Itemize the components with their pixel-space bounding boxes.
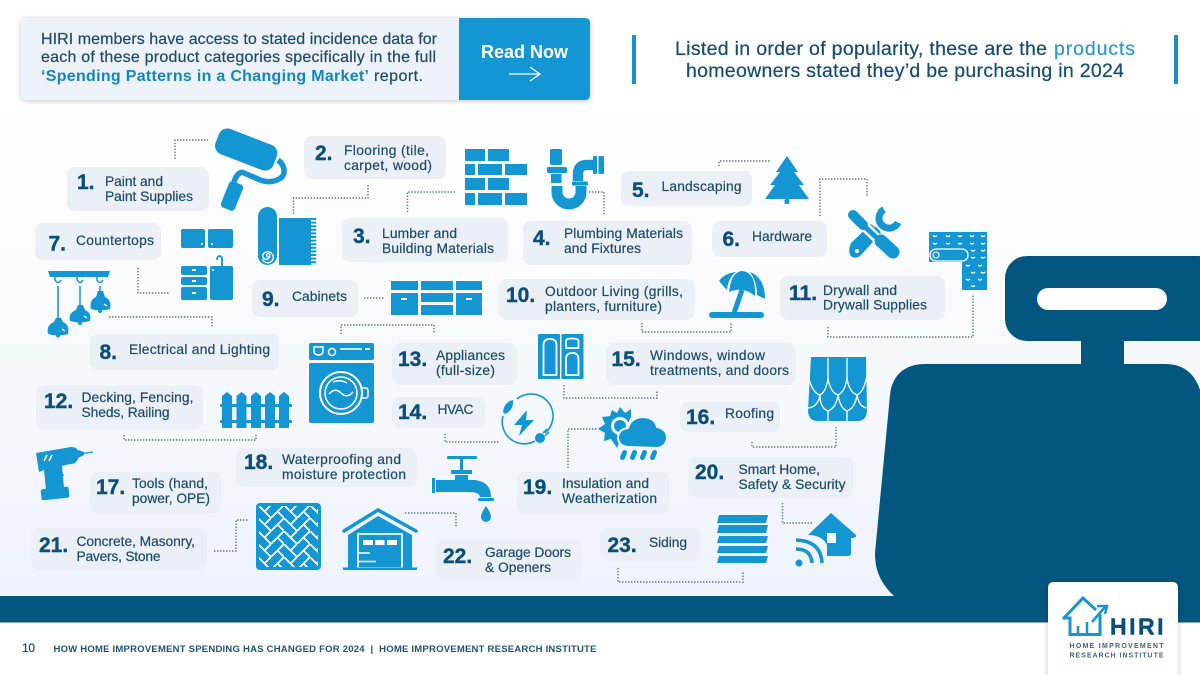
item 2: carpet, wood) <box>344 158 432 173</box>
logo: institute name <box>1070 643 1164 660</box>
icon: screwdriver and wrench <box>849 210 898 258</box>
item 3 <box>342 218 508 262</box>
item 1 <box>67 167 209 211</box>
item 19: 19. <box>523 476 552 499</box>
connector 8 <box>109 317 212 327</box>
logo: house mark <box>1063 598 1107 634</box>
callout text: report. <box>374 68 423 85</box>
item 17: 17. <box>96 476 125 499</box>
logo: wordmark: HIRI <box>1110 614 1164 640</box>
connector 2 <box>294 185 368 214</box>
item 18: Waterproofing and <box>282 452 401 467</box>
connector 12 <box>124 435 256 440</box>
item 2: Flooring (tile, <box>344 143 429 158</box>
item 18 <box>236 448 417 487</box>
item 4: and Fixtures <box>564 241 641 256</box>
icon: dripping faucet <box>432 456 494 522</box>
item 11: 11. <box>789 282 817 305</box>
item 4 <box>523 221 692 265</box>
icon: sun, cloud and rain <box>598 407 667 458</box>
item 20: Safety & Security <box>738 477 846 492</box>
connector 21 <box>214 520 248 551</box>
item 16 <box>680 402 780 432</box>
headline: products <box>1054 38 1135 60</box>
icon: patio umbrella <box>709 271 765 318</box>
item 22: 22. <box>443 545 472 568</box>
item 12 <box>36 385 203 429</box>
item 13: 13. <box>398 348 427 371</box>
headline <box>675 38 1135 82</box>
callout text: HIRI members have access to stated incidence data for <box>41 31 438 48</box>
icon: kitchen cabinets <box>181 229 233 300</box>
item 18: moisture protection <box>282 467 406 482</box>
item 15 <box>606 343 796 385</box>
connector 13 <box>341 325 434 334</box>
item 5 <box>621 171 752 206</box>
item 1: Paint Supplies <box>105 189 193 204</box>
headline: Listed in order of popularity, these are the <box>675 38 1047 60</box>
connector 11 <box>828 295 973 337</box>
item 21: 21. <box>39 534 68 557</box>
icon: rug roll <box>258 207 314 265</box>
icon: cordless drill <box>36 447 93 500</box>
item 15: treatments, and doors <box>650 363 789 378</box>
button: Read Now: Read Now <box>481 42 569 62</box>
logo: institute name: HOME IMPROVEMENT <box>1070 643 1164 650</box>
item 14 <box>392 397 485 428</box>
item 15: Windows, window <box>650 348 765 363</box>
item 15: 15. <box>612 348 641 371</box>
footer band <box>0 596 1200 622</box>
item 12: Sheds, Railing <box>82 405 170 420</box>
item 19: Insulation and <box>562 476 649 491</box>
item 20: Smart Home, <box>738 462 820 477</box>
footer: document title: HOW HOME IMPROVEMENT SPENDING HAS CHANGED FOR 2024 | HOME IMPROVEMENT RESEARCH INSTITUTE <box>54 644 596 655</box>
item 22 <box>436 539 582 581</box>
item 2: 2. <box>315 142 333 165</box>
connector 5 <box>719 161 770 166</box>
item 10: Outdoor Living (grills, <box>545 284 683 299</box>
item 13: Appliances <box>436 348 505 363</box>
item 14: HVAC <box>438 402 474 417</box>
item 2 <box>304 136 446 179</box>
connector 15 <box>564 385 657 398</box>
connector 10 <box>642 323 731 332</box>
headline left bar <box>632 35 636 84</box>
icon: herringbone pavers <box>256 503 321 570</box>
item 3: Building Materials <box>382 241 494 256</box>
icon: garage <box>343 510 417 570</box>
item 8 <box>90 334 279 370</box>
item 21 <box>31 528 207 570</box>
item 19: Weatherization <box>562 491 657 506</box>
callout text: each of these product categories specifically in the full <box>41 49 436 66</box>
connector 4 <box>589 192 604 216</box>
item 7 <box>35 223 161 260</box>
connector 20 <box>782 503 812 523</box>
icon: paint roller <box>212 126 284 212</box>
icon: drywall scroll <box>929 232 987 290</box>
item 9: Cabinets <box>292 289 347 304</box>
item 20: 20. <box>695 461 724 484</box>
item 13 <box>392 343 517 385</box>
headline: homeowners stated they’d be purchasing in 2024 <box>686 60 1124 82</box>
item 3: Lumber and <box>382 226 457 241</box>
item 10 <box>499 279 695 320</box>
item 10: 10. <box>506 284 535 307</box>
icon: window and door <box>538 334 584 379</box>
item 21: Concrete, Masonry, <box>76 534 195 549</box>
item 8: Electrical and Lighting <box>129 342 270 357</box>
icon: siding <box>717 515 768 563</box>
icon: picket fence <box>220 392 292 428</box>
item 20 <box>688 457 853 498</box>
item 14: 14. <box>398 401 427 424</box>
item 3: 3. <box>353 225 371 248</box>
connector 7 <box>138 268 170 293</box>
item 4: Plumbing Materials <box>564 226 683 241</box>
connector 6 <box>820 179 867 216</box>
connector 1 <box>175 140 208 159</box>
button: Read Now <box>459 18 590 100</box>
dark silhouette: paint can shape <box>875 256 1200 597</box>
item 5: 5. <box>632 179 650 202</box>
headline right bar <box>1174 35 1178 84</box>
item 7: 7. <box>48 232 66 256</box>
connector 16 <box>752 427 836 447</box>
item 7: Countertops <box>76 233 154 248</box>
item 23: 23. <box>608 534 637 557</box>
item 8: 8. <box>100 341 117 364</box>
item 9: 9. <box>262 288 280 311</box>
item 11: Drywall Supplies <box>823 298 927 312</box>
connector 9 <box>364 297 385 299</box>
item 12: 12. <box>44 390 73 413</box>
item 6 <box>712 221 827 257</box>
item 5: Landscaping <box>662 179 742 194</box>
item 21: Pavers, Stone <box>76 549 161 564</box>
item 12: Decking, Fencing, <box>82 390 194 405</box>
icon: energy cycle <box>502 394 553 444</box>
footer: page number: 10 <box>22 641 35 655</box>
connector 14 <box>445 434 500 442</box>
item 22: & Openers <box>485 560 551 575</box>
icon: washing machine <box>309 343 374 423</box>
logo: institute name: RESEARCH INSTITUTE <box>1070 652 1164 660</box>
callout: report access with Read Now button <box>21 18 590 100</box>
item 17: Tools (hand, <box>132 476 208 491</box>
item 10: planters, furniture) <box>545 299 662 314</box>
item 6: Hardware <box>752 229 812 244</box>
item 1: 1. <box>77 171 95 194</box>
item 11: Drywall and <box>823 283 897 298</box>
icon: tree <box>765 156 809 204</box>
item 17 <box>90 472 221 513</box>
icon: plumbing pipe <box>547 149 604 204</box>
connector 23 <box>618 568 743 582</box>
callout text: ‘Spending Patterns in a Changing Market’ <box>41 68 369 85</box>
icon: roof shingles <box>808 357 867 421</box>
connector 22 <box>405 513 456 528</box>
icon: brick wall <box>465 149 527 205</box>
item 19 <box>517 472 669 514</box>
item 16: Roofing <box>725 406 774 421</box>
item 1: Paint and <box>105 174 163 189</box>
item 23: Siding <box>649 535 687 550</box>
icon: pendant lights <box>48 271 110 338</box>
item 16: 16. <box>686 406 715 429</box>
logo card <box>1048 582 1178 675</box>
item 4: 4. <box>533 227 551 250</box>
item 22: Garage Doors <box>485 545 571 560</box>
item 11 <box>780 276 945 320</box>
item 23 <box>600 528 700 561</box>
icon: smart home <box>796 513 856 566</box>
item 18: 18. <box>244 451 273 474</box>
item 6: 6. <box>722 228 740 251</box>
icon: cabinet set <box>391 281 482 315</box>
item 9 <box>252 280 358 317</box>
item 13: (full-size) <box>436 363 495 378</box>
connector 19 <box>568 429 598 468</box>
item 17: power, OPE) <box>132 491 210 506</box>
callout text <box>41 31 438 85</box>
connector 3 <box>408 192 455 212</box>
